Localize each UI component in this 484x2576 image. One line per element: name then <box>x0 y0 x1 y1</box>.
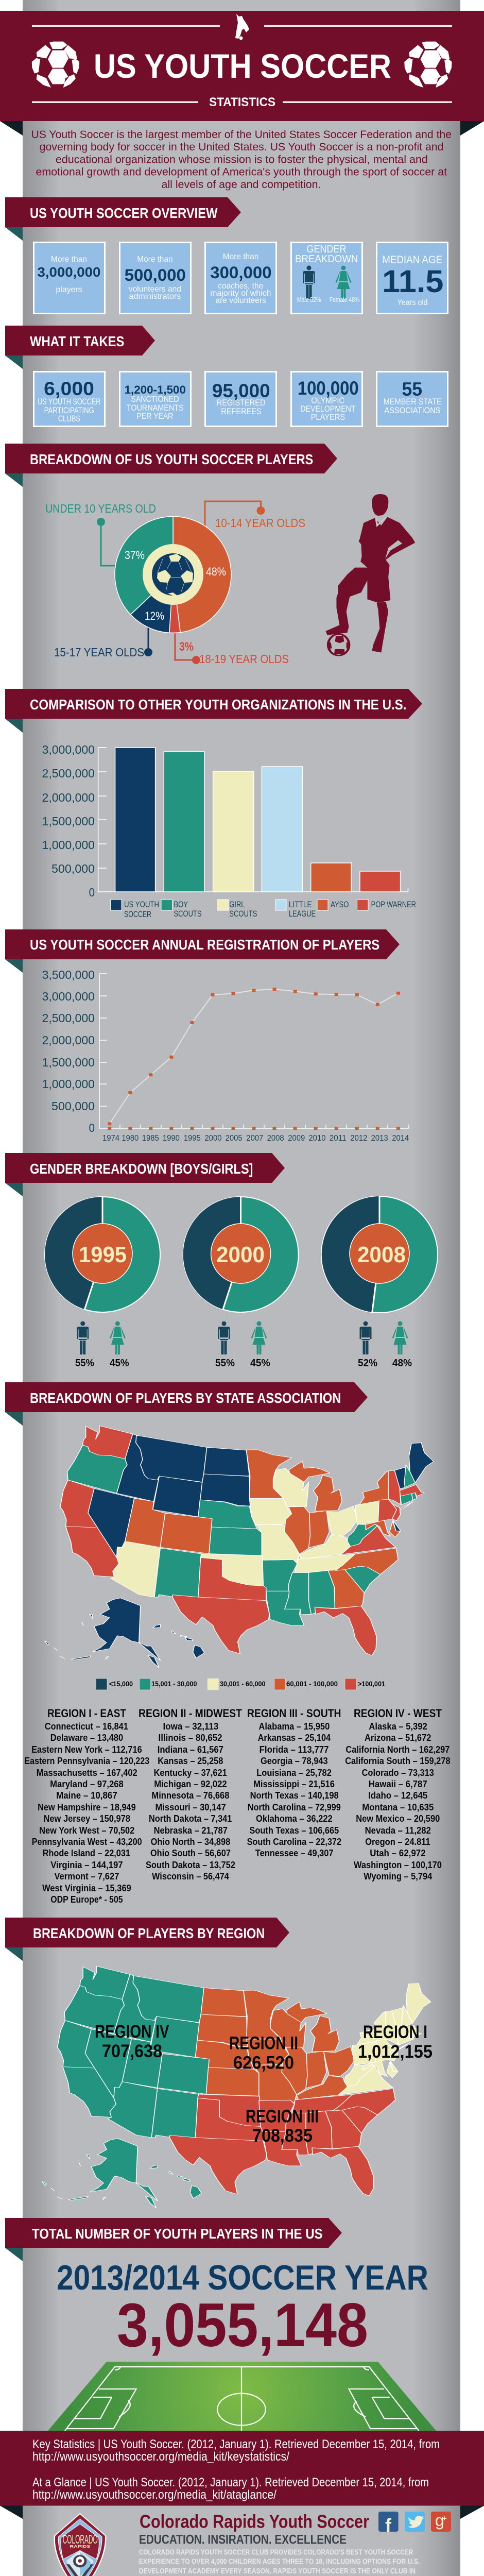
region II list: Ohio South – 56,607 <box>150 1848 231 1858</box>
card: 300,000 coaches <box>210 252 272 305</box>
region I list: Maryland – 97,268 <box>50 1778 124 1789</box>
region II list: Missouri – 30,147 <box>155 1802 226 1812</box>
card: 3,000,000 players: More than <box>51 255 87 264</box>
boys and girls figures 2000: 55% <box>215 1358 235 1369</box>
region III list: Tennessee – 49,307 <box>255 1848 334 1858</box>
donut chart: age groups: 10-14 YEAR OLDS <box>215 516 305 530</box>
bar chart legend: LEAGUE <box>289 909 316 919</box>
icon: facebook: f <box>385 2515 392 2536</box>
card: state associations: MEMBER STATE <box>384 397 442 406</box>
bar chart legend: LITTLE <box>289 900 312 909</box>
icon: kicking player <box>235 14 249 40</box>
region II list: North Dakota – 7,341 <box>149 1813 232 1824</box>
boys and girls figures 1995: 45% <box>110 1358 129 1369</box>
card: median age <box>382 254 444 307</box>
line chart y labels <box>42 968 95 1134</box>
card: median age: MEDIAN AGE <box>382 254 442 266</box>
card: referees: REGISTERED <box>217 398 266 408</box>
donut: 1995 <box>45 1197 160 1369</box>
region I list: Virginia – 144,197 <box>50 1859 123 1870</box>
region labels: REGION I <box>363 2022 427 2042</box>
club description <box>139 2548 448 2576</box>
card: 6,000 clubs <box>38 378 100 423</box>
bar chart axis labels: 1,000,000 <box>42 838 95 852</box>
region labels: 708,835 <box>252 2126 313 2146</box>
card: olympic development: OLYMPIC <box>311 396 344 405</box>
panel: what it takes cards <box>34 372 448 427</box>
card: 500,000 volunteers: administrators <box>129 292 181 301</box>
heading: comparison <box>5 689 422 733</box>
card: tournaments <box>125 383 186 421</box>
region I list: Eastern New York – 112,716 <box>31 1744 142 1755</box>
region IV list: Alaska – 5,392 <box>369 1721 427 1732</box>
heading: players by region: BREAKDOWN OF PLAYERS BY REGION <box>33 1925 265 1941</box>
card: state associations: ASSOCIATIONS <box>384 406 441 415</box>
bar chart axis labels: 1,500,000 <box>42 815 95 828</box>
line chart x labels <box>102 1134 409 1143</box>
region IV list: Colorado – 73,313 <box>362 1767 434 1778</box>
card: 500,000 volunteers: volunteers and <box>129 285 181 294</box>
region IV list: Hawaii – 6,787 <box>369 1778 427 1789</box>
line chart x labels: 2007 <box>246 1134 263 1143</box>
bar chart axis labels: 2,500,000 <box>42 767 95 780</box>
region IV list: California North – 162,297 <box>345 1744 450 1755</box>
card: olympic development <box>298 378 359 422</box>
line chart x labels: 2000 <box>205 1134 222 1143</box>
bar chart axis labels: 0 <box>89 886 95 899</box>
intro text: emotional growth and development of America's youth through the sport of soccer at <box>36 166 447 178</box>
line chart x labels: 2005 <box>226 1134 243 1143</box>
card: gender breakdown: BREAKDOWN <box>295 253 358 265</box>
bar chart: youth organizations <box>42 743 416 919</box>
line chart x labels: 1995 <box>184 1134 201 1143</box>
heading: overview: US YOUTH SOCCER OVERVIEW <box>30 205 218 221</box>
card: median age: 11.5 <box>382 264 444 299</box>
line chart x labels: 2010 <box>309 1134 326 1143</box>
donut chart: age groups <box>45 501 305 666</box>
card: olympic development: PLAYERS <box>311 413 345 422</box>
line chart y labels: 500,000 <box>51 1099 95 1113</box>
donut chart: age groups: 18-19 YEAR OLDS <box>199 652 289 666</box>
region III list: North Carolina – 72,999 <box>248 1802 341 1812</box>
region II list: Kansas – 25,258 <box>158 1755 223 1766</box>
icon: google plus: + <box>442 2514 447 2523</box>
boys and girls figures 2008: 48% <box>392 1358 412 1369</box>
heading: annual registration <box>5 929 400 973</box>
region III list: Alabama – 15,950 <box>258 1721 330 1732</box>
boys and girls figures 2000 <box>215 1321 270 1369</box>
logo: Colorado Rapids youth soccer club: RAPIDS <box>70 2544 91 2549</box>
line chart y labels: 1,000,000 <box>42 1077 95 1091</box>
region II list: REGION II - MIDWEST <box>139 1707 242 1720</box>
card: gender breakdown: Female 48% <box>330 296 359 303</box>
region labels: 1,012,155 <box>358 2042 433 2062</box>
intro text: educational organization whose mission is to foster the physical, mental and <box>56 154 428 166</box>
region II list: Wisconsin – 56,474 <box>152 1871 230 1882</box>
region labels: REGION III <box>246 2107 319 2127</box>
references banner <box>0 2431 484 2519</box>
region III list: Mississippi – 21,516 <box>253 1778 335 1789</box>
region II list <box>139 1707 242 1882</box>
card: olympic development: 100,000 <box>298 378 359 399</box>
soccer field <box>48 2362 436 2431</box>
card: referees: 95,000 <box>212 380 270 401</box>
region I list: New York West – 70,502 <box>39 1825 134 1836</box>
region IV list: Idaho – 12,645 <box>368 1790 427 1801</box>
donut chart: age groups: 37% <box>125 549 145 562</box>
region IV list: Utah – 62,972 <box>370 1848 426 1858</box>
heading: breakdown of players: BREAKDOWN OF US YOUTH SOCCER PLAYERS <box>30 451 313 467</box>
region II list: Michigan – 92,022 <box>154 1778 227 1789</box>
region labels: 626,520 <box>233 2053 294 2073</box>
card: 6,000 clubs: CLUBS <box>58 414 80 423</box>
region II list: Nebraska – 21,787 <box>154 1825 228 1836</box>
line chart x labels: 1980 <box>122 1134 139 1143</box>
region I list: Vermont – 7,627 <box>55 1871 119 1882</box>
card: tournaments: SANCTIONED <box>131 395 179 404</box>
map legend: <15,000 <box>109 1680 133 1688</box>
region II list: South Dakota – 13,752 <box>146 1859 235 1870</box>
bar chart legend <box>111 900 416 919</box>
tagline: EDUCATION. INSIRATION. EXCELLENCE <box>139 2533 347 2547</box>
icon: player silhouette with ball <box>325 494 415 655</box>
region IV list: Montana – 10,635 <box>362 1802 434 1812</box>
choropleth map: players by state <box>45 1426 434 1668</box>
region III list: Florida – 113,777 <box>260 1744 329 1755</box>
heading: state association <box>5 1382 368 1426</box>
region II list: Indiana – 61,567 <box>158 1744 223 1755</box>
region I list: West Virginia – 15,369 <box>42 1883 131 1893</box>
region II list: Iowa – 32,113 <box>163 1721 218 1732</box>
bar chart axis labels: 2,000,000 <box>42 791 95 804</box>
heading: gender breakdown: GENDER BREAKDOWN [BOYS/GIRLS] <box>30 1161 253 1177</box>
line chart x labels: 1990 <box>163 1134 180 1143</box>
intro text: all levels of age and competition. <box>162 179 321 191</box>
title: US YOUTH SOCCER <box>94 47 391 85</box>
region IV list: Oregon – 24.811 <box>365 1836 430 1847</box>
region III list: Georgia – 78,943 <box>261 1755 328 1766</box>
region II list: Illinois – 80,652 <box>159 1732 222 1743</box>
map legend <box>96 1679 385 1690</box>
icon: google plus: g <box>435 2511 444 2530</box>
card: olympic development: DEVELOPMENT <box>300 404 356 414</box>
card: 500,000 volunteers <box>125 255 186 301</box>
bar chart legend: AYSO <box>331 900 349 909</box>
card: 500,000 volunteers: More than <box>137 255 173 264</box>
line chart y labels: 2,500,000 <box>42 1011 95 1025</box>
heading: annual registration: US YOUTH SOCCER ANNUAL REGISTRATION OF PLAYERS <box>30 937 379 953</box>
line chart x labels: 1985 <box>142 1134 159 1143</box>
intro text <box>31 129 452 191</box>
region I list: Rhode Island – 22,031 <box>43 1848 130 1858</box>
line chart x labels: 2014 <box>392 1134 409 1143</box>
line chart x labels: 2012 <box>350 1134 367 1143</box>
region I list: Eastern Pennsylvania – 120,223 <box>24 1755 149 1766</box>
region I list: Delaware – 13,480 <box>50 1732 123 1743</box>
region I list: Maine – 10,867 <box>56 1790 117 1801</box>
region IV list: Nevada – 11,282 <box>365 1825 431 1836</box>
card: 6,000 clubs: US YOUTH SOCCER <box>38 397 100 406</box>
region I list: REGION I - EAST <box>47 1707 126 1720</box>
boys and girls figures 2008: 52% <box>358 1358 377 1369</box>
bar chart legend: SOCCER <box>124 910 151 919</box>
top banner <box>0 11 484 135</box>
line chart y labels: 2,000,000 <box>42 1033 95 1047</box>
boys and girls figures 2000: 45% <box>250 1358 270 1369</box>
card: median age: Years old <box>397 298 427 307</box>
heading: overview <box>5 197 241 241</box>
region III list: Louisiana – 25,782 <box>256 1767 332 1778</box>
bar chart axis labels <box>42 743 95 899</box>
subtitle: STATISTICS <box>209 95 275 109</box>
bar chart legend: US YOUTH <box>124 900 159 909</box>
icon: facebook <box>378 2512 399 2536</box>
card: referees: REFEREES <box>221 407 262 416</box>
region labels <box>95 2022 433 2146</box>
bar chart legend: BOY <box>174 900 188 909</box>
card: 300,000 coaches: 300,000 <box>210 263 272 282</box>
bar chart axis labels: 500,000 <box>51 862 95 875</box>
club description: DEVELOPMENT ACADEMY EVERY SEASON. RAPIDS YOUTH SOCCER IS THE ONLY CLUB IN <box>139 2567 416 2575</box>
donut: 2000 <box>183 1197 299 1369</box>
references banner: http://www.usyouthsoccer.org/media_kit/ataglance/ <box>32 2488 276 2502</box>
donut: 2008: 2008 <box>357 1242 406 1267</box>
card: 300,000 coaches: More than <box>223 252 258 261</box>
boys and girls figures 1995: 55% <box>75 1358 94 1369</box>
line chart x labels: 2008 <box>267 1134 284 1143</box>
bar chart axis labels: 3,000,000 <box>42 743 95 756</box>
card: 6,000 clubs: PARTICIPATING <box>44 406 94 415</box>
card: 3,000,000 players: players <box>56 285 82 294</box>
region II list: Minnesota – 76,668 <box>151 1790 230 1801</box>
region I list: Massachusetts – 167,402 <box>37 1767 137 1778</box>
card: gender breakdown: Male 52% <box>297 296 321 303</box>
region III list: REGION III - SOUTH <box>247 1707 341 1720</box>
region labels: REGION II <box>229 2033 298 2054</box>
heading: what it takes <box>5 326 155 369</box>
bar chart legend: GIRL <box>229 900 245 909</box>
map legend: >100,001 <box>358 1680 385 1688</box>
card: 300,000 coaches: are volunteers <box>215 296 266 305</box>
heading: what it takes: WHAT IT TAKES <box>30 333 124 349</box>
total: number of players: 3,055,148 <box>117 2291 368 2360</box>
heading: gender breakdown <box>5 1153 285 1196</box>
icon: soccer ball left <box>32 42 79 88</box>
heading: total players <box>5 2218 342 2261</box>
card: state associations <box>384 379 442 415</box>
card: 500,000 volunteers: 500,000 <box>125 266 186 284</box>
region III list: North Texas – 140,198 <box>250 1790 339 1801</box>
map legend: 15,001 - 30,000 <box>151 1680 197 1688</box>
map legend: 30,001 - 60,000 <box>220 1680 266 1688</box>
region IV list: REGION IV - WEST <box>354 1707 442 1720</box>
region IV list <box>345 1707 451 1882</box>
region I list: Connecticut – 16,841 <box>45 1721 128 1732</box>
intro text: US Youth Soccer is the largest member of the United States Soccer Federation and the <box>31 129 452 141</box>
region III list <box>247 1707 341 1858</box>
region map <box>42 1966 431 2208</box>
donut chart: age groups: 3% <box>179 640 194 654</box>
donut chart: age groups: 12% <box>145 609 164 622</box>
club description: EXPERIENCE TO OVER 4,000 CHILDREN AGES THREE TO 18, INCLUDING OPTIONS FOR U.S. <box>139 2558 420 2566</box>
region II list: Kentucky – 37,621 <box>154 1767 227 1778</box>
line chart: annual registration <box>42 968 409 1143</box>
region I list: New Hampshire – 18,949 <box>38 1802 136 1812</box>
region III list: Arkansas – 25,104 <box>258 1732 331 1743</box>
line chart x labels: 2009 <box>288 1134 305 1143</box>
card: 300,000 coaches: majority of which <box>210 289 271 298</box>
donut chart: age groups: 48% <box>206 565 226 578</box>
donut: 2008 <box>321 1196 438 1369</box>
boys and girls figures 1995 <box>75 1321 129 1369</box>
card: tournaments: 1,200-1,500 <box>125 383 186 396</box>
card: gender breakdown: GENDER <box>306 244 347 255</box>
heading: players by region <box>5 1918 289 1961</box>
icon: soccer ball right <box>404 42 452 88</box>
line chart y labels: 1,500,000 <box>42 1056 95 1069</box>
card: 300,000 coaches: coaches, the <box>218 282 263 291</box>
region I list: Pennsylvania West – 43,200 <box>32 1836 142 1847</box>
icon: twitter <box>405 2512 425 2532</box>
panel: overview cards <box>34 242 448 313</box>
icon: google plus <box>431 2511 451 2532</box>
card: 3,000,000 players <box>37 255 100 294</box>
region III list: Oklahoma – 36,222 <box>256 1813 333 1824</box>
card: gender breakdown <box>295 244 359 303</box>
donut: 2000: 2000 <box>216 1242 265 1267</box>
donut chart: age groups: UNDER 10 YEARS OLD <box>45 502 156 515</box>
region labels: 707,638 <box>102 2041 162 2061</box>
region IV list: Wyoming – 5,794 <box>364 1871 433 1882</box>
card: state associations: 55 <box>402 379 422 400</box>
heading: state association: BREAKDOWN OF PLAYERS BY STATE ASSOCIATION <box>30 1390 341 1406</box>
card: tournaments: TOURNAMENTS <box>127 403 184 413</box>
donut chart: age groups: 15-17 YEAR OLDS <box>54 646 144 659</box>
references banner: http://www.usyouthsoccer.org/media_kit/keystatistics/ <box>32 2450 289 2464</box>
card: tournaments: PER YEAR <box>137 412 173 421</box>
card: referees <box>212 380 270 416</box>
bar chart legend: POP WARNER <box>371 900 416 909</box>
club description: COLORADO RAPIDS YOUTH SOCCER CLUB PROVIDES COLORADO'S BEST YOUTH SOCCER <box>139 2548 413 2556</box>
bar chart legend: SCOUTS <box>174 909 202 919</box>
icon: center ball <box>152 553 194 596</box>
region I list <box>24 1707 149 1905</box>
region II list: Ohio North – 34,898 <box>151 1836 230 1847</box>
region I list: ODP Europe* - 505 <box>50 1894 123 1905</box>
card: 6,000 clubs: 6,000 <box>44 378 94 399</box>
map legend: 60,001 - 100,000 <box>286 1680 338 1688</box>
bar chart legend: SCOUTS <box>229 909 257 919</box>
boys and girls figures 2008 <box>358 1321 412 1369</box>
region IV list: California South – 159,278 <box>345 1755 451 1766</box>
total: soccer year: 2013/2014 SOCCER YEAR <box>57 2258 428 2297</box>
region IV list: Arizona – 51,672 <box>365 1732 431 1743</box>
region I list: New Jersey – 150,978 <box>43 1813 130 1824</box>
line chart y labels: 0 <box>89 1121 95 1134</box>
line chart x labels: 2011 <box>330 1134 347 1143</box>
line chart x labels: 2013 <box>371 1134 388 1143</box>
region labels: REGION IV <box>95 2022 169 2042</box>
region III list: South Texas – 106,665 <box>249 1825 339 1836</box>
logo: Colorado Rapids youth soccer club <box>54 2513 106 2576</box>
heading: breakdown of players <box>5 444 337 487</box>
intro text: governing body for soccer in the United States. US Youth Soccer is a non-profit and <box>40 141 443 153</box>
heading: total players: TOTAL NUMBER OF YOUTH PLAYERS IN THE US <box>32 2226 323 2242</box>
line chart y labels: 3,000,000 <box>42 990 95 1003</box>
donut: 1995: 1995 <box>79 1242 127 1267</box>
line chart y labels: 3,500,000 <box>42 968 95 981</box>
region III list: South Carolina – 22,372 <box>247 1836 341 1847</box>
card: 3,000,000 players: 3,000,000 <box>37 264 100 280</box>
line chart markers <box>108 988 400 1130</box>
region IV list: New Mexico – 20,590 <box>356 1813 440 1824</box>
line chart x labels: 1974 <box>102 1134 119 1143</box>
region IV list: Washington – 100,170 <box>354 1859 442 1870</box>
heading: comparison: COMPARISON TO OTHER YOUTH ORGANIZATIONS IN THE U.S. <box>30 697 406 713</box>
logo: Colorado Rapids youth soccer club: COLORADO <box>63 2533 98 2547</box>
club name: Colorado Rapids Youth Soccer <box>140 2511 369 2532</box>
